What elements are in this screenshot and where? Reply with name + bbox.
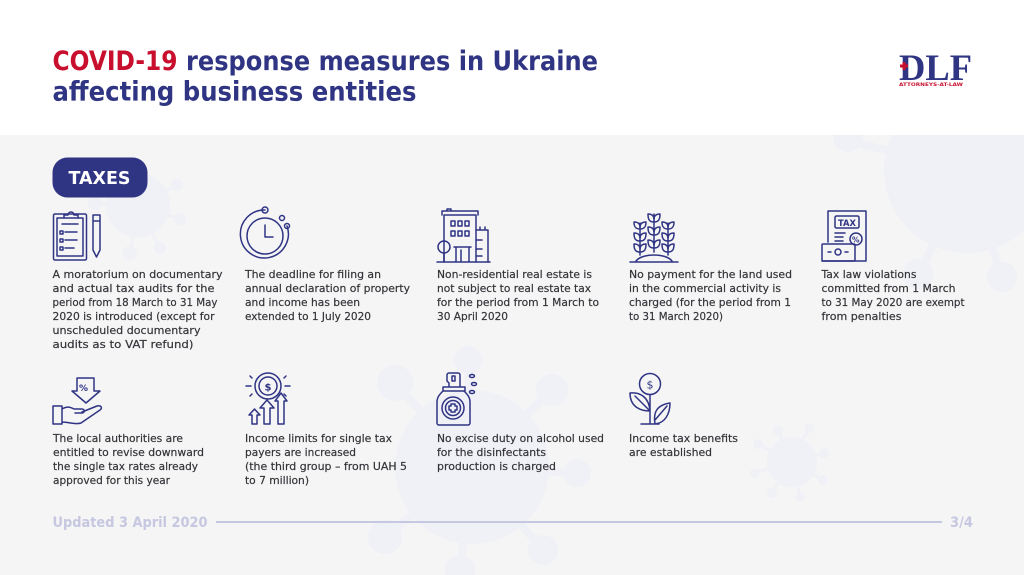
- icon: hand with percent arrow: [53, 378, 101, 424]
- text: audit moratorium: A moratorium on documentary: [52, 269, 222, 281]
- icon: money plant: $: [646, 378, 654, 392]
- title: [52, 46, 598, 108]
- heading: TAXES badge: TAXES: [68, 168, 130, 189]
- text: penalties exemption: from penalties: [822, 311, 902, 323]
- title: affecting business entities: [52, 76, 416, 108]
- text: penalties exemption: [820, 269, 964, 323]
- icon: wheat field: [630, 214, 678, 262]
- icon: hand with percent arrow: %: [79, 384, 88, 394]
- text: real estate tax: 30 April 2020: [437, 311, 508, 323]
- text: excise duty: [437, 433, 604, 473]
- text: declaration deadline: annual declaration of property: [245, 283, 410, 295]
- text: penalties exemption: to 31 May 2020 are exempt: [822, 297, 964, 309]
- icon: office building with tree: [437, 209, 490, 262]
- icon: coin with rising arrows: [246, 373, 290, 424]
- text: excise duty: production is charged: [437, 461, 556, 473]
- text: excise duty: for the disinfectants: [437, 447, 546, 459]
- icon: tax document with cash: %: [852, 236, 860, 244]
- title: response measures in Ukraine: [186, 46, 598, 77]
- text: land payment: No payment for the land used: [629, 269, 792, 281]
- text: real estate tax: not subject to real estate tax: [437, 283, 591, 295]
- footer: page number: 3/4: [950, 515, 973, 531]
- text: local authorities: approved for this year: [53, 475, 171, 487]
- footer: rule: [216, 521, 942, 523]
- background virus: bottom centre: [368, 346, 591, 575]
- text: real estate tax: Non-residential real estate is: [437, 269, 592, 281]
- text: audit moratorium: 2020 is introduced (except for: [52, 311, 215, 323]
- icon: tax document with cash: [822, 211, 866, 261]
- text: declaration deadline: and income has been: [245, 297, 360, 309]
- text: declaration deadline: extended to 1 July 2020: [245, 311, 371, 323]
- panel: white header: [0, 0, 1024, 135]
- text: audit moratorium: [52, 269, 222, 351]
- text: income limits: to 7 million): [245, 475, 309, 487]
- icon: stopwatch clock: [240, 207, 290, 258]
- text: income tax benefits: Income tax benefits: [629, 433, 738, 445]
- text: income tax benefits: are established: [629, 447, 712, 459]
- text: excise duty: No excise duty on alcohol used: [437, 433, 604, 445]
- text: local authorities: [52, 433, 204, 487]
- panel: grey content background: [0, 135, 1024, 575]
- text: land payment: [629, 269, 792, 323]
- text: land payment: to 31 March 2020): [629, 311, 723, 323]
- text: audit moratorium: and actual tax audits for the: [52, 283, 214, 295]
- text: penalties exemption: committed from 1 March: [822, 283, 956, 295]
- background virus: bottom right small: [750, 423, 829, 502]
- text: income limits: (the third group – from UAH 5: [245, 461, 407, 473]
- title: COVID-19: [52, 46, 178, 77]
- icon: tax document with cash: TAX: [838, 219, 856, 229]
- text: local authorities: entitled to revise downward: [53, 447, 204, 459]
- text: local authorities: The local authorities are: [52, 433, 183, 445]
- text: local authorities: the single tax rates already: [53, 461, 198, 473]
- text: income tax benefits: [629, 433, 738, 459]
- icon: sanitizer spray bottle: [437, 373, 476, 425]
- logo: DLF: DLF: [899, 48, 972, 89]
- text: declaration deadline: The deadline for filing an: [244, 269, 381, 281]
- text: declaration deadline: [244, 269, 410, 323]
- icon: coin with rising arrows: $: [264, 382, 272, 394]
- text: penalties exemption: Tax law violations: [820, 269, 916, 281]
- text: income limits: payers are increased: [245, 447, 356, 459]
- icon: clipboard with pencil: [54, 212, 100, 260]
- text: land payment: in the commercial activity is: [629, 283, 781, 295]
- text: real estate tax: for the period from 1 March to: [437, 297, 599, 309]
- background virus: top left small: [88, 173, 186, 260]
- background virus: top right: [833, 87, 1024, 292]
- footer: update date: Updated 3 April 2020: [52, 515, 208, 531]
- text: income limits: Income limits for single tax: [245, 433, 392, 445]
- heading: TAXES badge: [52, 158, 148, 198]
- text: audit moratorium: audits as to VAT refund): [52, 339, 194, 351]
- text: audit moratorium: period from 18 March to 31 May: [52, 297, 218, 309]
- icon: money plant: [630, 374, 670, 424]
- text: real estate tax: [437, 269, 599, 323]
- text: income limits: [245, 433, 407, 487]
- text: land payment: charged (for the period from 1: [629, 297, 791, 309]
- logo: DLF: ATTORNEYS-AT-LAW: [899, 82, 963, 88]
- text: audit moratorium: unscheduled documentary: [52, 325, 200, 337]
